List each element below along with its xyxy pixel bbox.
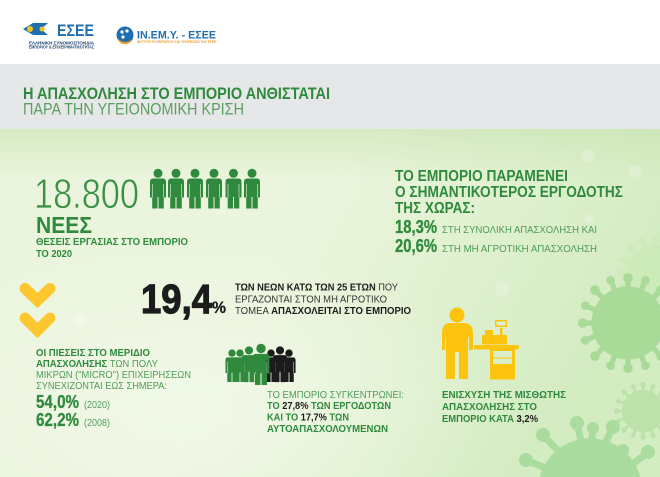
- text block: micro enterprises: ΣΥΝΕΧΙΖΟΝΤΑΙ ΕΩΣ ΣΗΜΕΡΑ:: [36, 380, 167, 392]
- stat: 18.800 new jobs: ΤΟ 2020: [36, 248, 72, 260]
- text block: micro enterprises: 62,2%: [36, 409, 79, 430]
- text block: wage employment: [442, 389, 566, 425]
- text block: largest employer: Ο ΣΗΜΑΝΤΙΚΟΤΕΡΟΣ ΕΡΓΟΔΟΤΗΣ: [395, 184, 623, 201]
- background panel: [0, 129, 660, 477]
- text block: largest employer: [395, 168, 623, 256]
- icon: six workers: [150, 169, 260, 208]
- text block: micro enterprises: ΜΙΚΡΩΝ ("MICRO") ΕΠΙΧΕΙΡΗΣΕΩΝ: [36, 369, 191, 381]
- text block: largest employer: ΣΤΗ ΜΗ ΑΓΡΟΤΙΚΗ ΑΠΑΣΧΟΛΗΣΗ: [442, 243, 597, 255]
- logo: INEMY: ΙΝΣΤΙΤΟΥΤΟ ΕΜΠΟΡΙΟΥ ΚΑΙ ΥΠΗΡΕΣΙΩΝ ΤΗΣ ΕΣΕΕ: [137, 40, 217, 44]
- text block: wage employment: ΕΝΙΣΧΥΣΗ ΤΗΣ ΜΙΣΘΩΤΗΣ: [442, 389, 566, 401]
- title band: [0, 64, 660, 129]
- logo: INEMY: IN.EM.Y. - ΕΣΕΕ: [137, 30, 216, 42]
- logo: INEMY: [116, 26, 217, 44]
- text block: largest employer: ΤΗΣ ΧΩΡΑΣ:: [395, 200, 475, 217]
- text block: youth employment: [235, 282, 411, 317]
- text block: micro enterprises: 54,0%: [36, 391, 79, 412]
- icon: virus bottom: [519, 416, 655, 477]
- stat: 18.800 new jobs: [34, 170, 188, 260]
- title: Η ΑΠΑΣΧΟΛΗΣΗ ΣΤΟ ΕΜΠΟΡΙΟ ΑΝΘΙΣΤΑΤΑΙ: [23, 84, 330, 103]
- text block: youth employment: ΕΡΓΑΖΟΝΤΑΙ ΣΤΟΝ ΜΗ ΑΓΡΟΤΙΚΟ: [235, 294, 387, 306]
- stat: 18.800 new jobs: ΘΕΣΕΙΣ ΕΡΓΑΣΙΑΣ ΣΤΟ ΕΜΠΟΡΙΟ: [36, 236, 188, 248]
- logo: ESEE: ΕΛΛΗΝΙΚΗ ΣΥΝΟΜΟΣΠΟΝΔΙΑ: [29, 40, 95, 46]
- text block: wage employment: ΕΜΠΟΡΙΟ ΚΑΤΑ 3,2%: [442, 413, 539, 425]
- text block: employers: ΤΟ 27,8% ΤΩΝ ΕΡΓΟΔΟΤΩΝ: [267, 400, 391, 412]
- text block: youth employment: ΤΩΝ ΝΕΩΝ ΚΑΤΩ ΤΩΝ 25 ΕΤΩΝ ΠΟΥ: [235, 282, 398, 294]
- icon: yellow cashier: [442, 308, 519, 380]
- stat: 18.800 new jobs: ΝΕΕΣ: [36, 212, 92, 238]
- text block: youth employment: ΤΟΜΕΑ ΑΠΑΣΧΟΛΕΙΤΑΙ ΣΤΟ ΕΜΠΟΡΙΟ: [235, 306, 411, 317]
- icon: virus top right: [617, 235, 660, 300]
- text block: micro enterprises: [36, 347, 191, 430]
- title: ΠΑΡΑ ΤΗΝ ΥΓΕΙΟΝΟΜΙΚΗ ΚΡΙΣΗ: [23, 100, 244, 118]
- logo: ESEE: ΕΜΠΟΡΙΟΥ & ΕΠΙΧΕΙΡΗΜΑΤΙΚΟΤΗΤΑΣ: [29, 44, 94, 50]
- text block: wage employment: ΑΠΑΣΧΟΛΗΣΗΣ ΣΤΟ: [442, 401, 537, 413]
- text block: largest employer: ΣΤΗ ΣΥΝΟΛΙΚΗ ΑΠΑΣΧΟΛΗΣΗ ΚΑΙ: [442, 224, 597, 236]
- text block: largest employer: 18,3%: [395, 216, 437, 237]
- stat: 18.800 new jobs: 18.800: [34, 170, 139, 217]
- icon: virus small right: [614, 382, 660, 440]
- title: [23, 84, 330, 118]
- header bar: [0, 0, 660, 64]
- icon: employers group: [225, 344, 296, 385]
- text block: largest employer: ΤΟ ΕΜΠΟΡΙΟ ΠΑΡΑΜΕΝΕΙ: [395, 168, 568, 185]
- text block: micro enterprises: ΑΠΑΣΧΟΛΗΣΗΣ ΤΩΝ ΠΟΛΥ: [36, 358, 158, 370]
- text block: employers: [267, 389, 404, 435]
- stat: 19,4%: %: [212, 299, 226, 317]
- text block: employers: ΚΑΙ ΤΟ 17,7% ΤΩΝ: [267, 412, 349, 424]
- text block: micro enterprises: (2020): [84, 400, 110, 411]
- icon: virus large right: [578, 273, 660, 373]
- icon: yellow down chevrons: [25, 288, 50, 330]
- text block: micro enterprises: (2008): [84, 418, 110, 429]
- text block: employers: ΑΥΤΟΑΠΑΣΧΟΛΟΥΜΕΝΩΝ: [267, 423, 388, 435]
- logo: ESEE: [23, 22, 95, 50]
- stat: 19,4%: 19,4: [141, 276, 212, 322]
- text block: largest employer: 20,6%: [395, 235, 437, 256]
- logo: ESEE: ΕΣΕΕ: [57, 22, 94, 40]
- text block: micro enterprises: ΟΙ ΠΙΕΣΕΙΣ ΣΤΟ ΜΕΡΙΔΙΟ: [36, 347, 150, 359]
- text block: employers: ΤΟ ΕΜΠΟΡΙΟ ΣΥΓΚΕΝΤΡΩΝΕΙ:: [267, 389, 404, 401]
